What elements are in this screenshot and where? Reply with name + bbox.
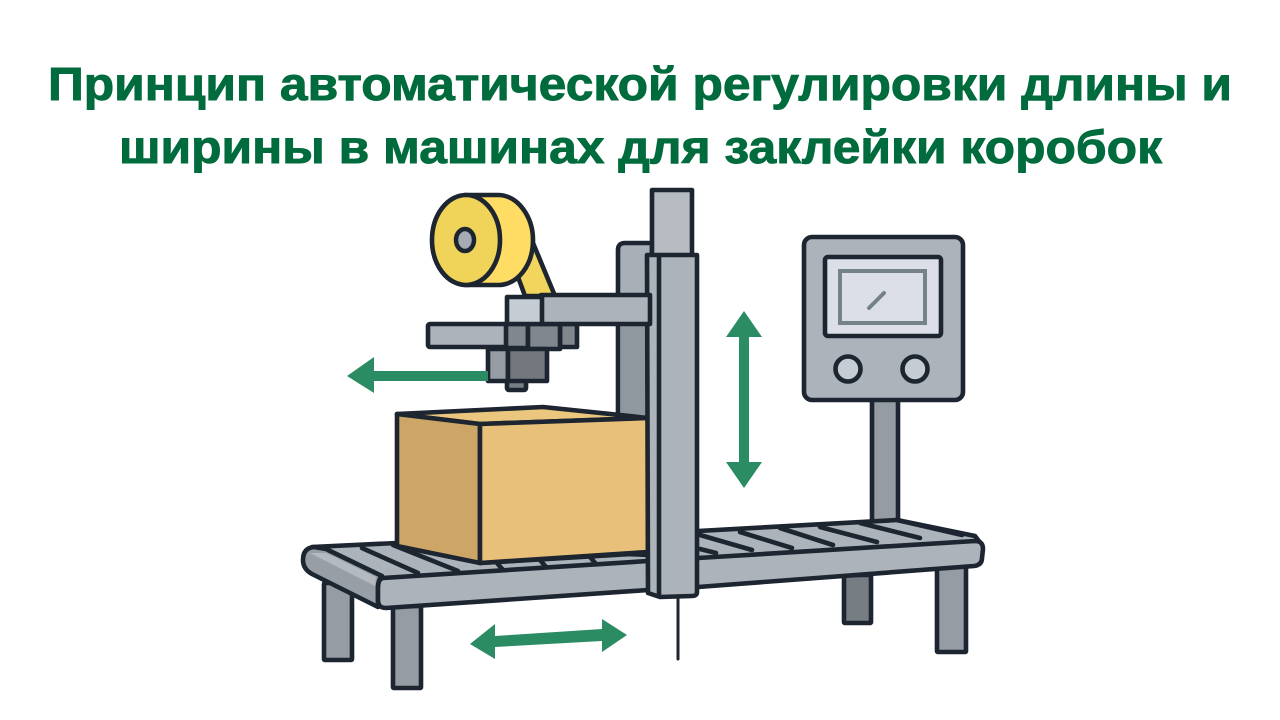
roll face [432, 195, 500, 285]
rollers [362, 520, 962, 573]
title: ширины в машинах для заклейки коробок [119, 121, 1163, 173]
machine illustration [303, 190, 983, 688]
control panel [804, 237, 963, 400]
tape roll [432, 195, 555, 296]
title: Принцип автоматической регулировки длины и [48, 58, 1232, 110]
upper arm [541, 295, 650, 324]
conveyor belt [303, 520, 983, 608]
support rod [676, 597, 680, 659]
vertical column [647, 190, 697, 597]
rear column [618, 243, 652, 422]
roll arm [518, 243, 555, 296]
roll body [465, 195, 533, 285]
buttons [836, 356, 860, 382]
arrow: horizontal [470, 619, 627, 659]
control panel post [872, 398, 898, 522]
roll hub [456, 229, 474, 251]
screen [825, 257, 941, 336]
arrow: left [347, 357, 488, 393]
cardboard box [397, 407, 648, 563]
box side [397, 414, 480, 563]
box front [480, 418, 648, 563]
nozzle [507, 380, 526, 390]
box top [397, 407, 648, 424]
title [48, 58, 1232, 173]
conveyor front rail [378, 541, 983, 608]
conveyor top surface [312, 520, 982, 580]
conveyor legs [324, 566, 966, 688]
conveyor left end [303, 547, 382, 607]
tape head assembly [428, 295, 650, 390]
arrow: vertical [726, 311, 762, 488]
